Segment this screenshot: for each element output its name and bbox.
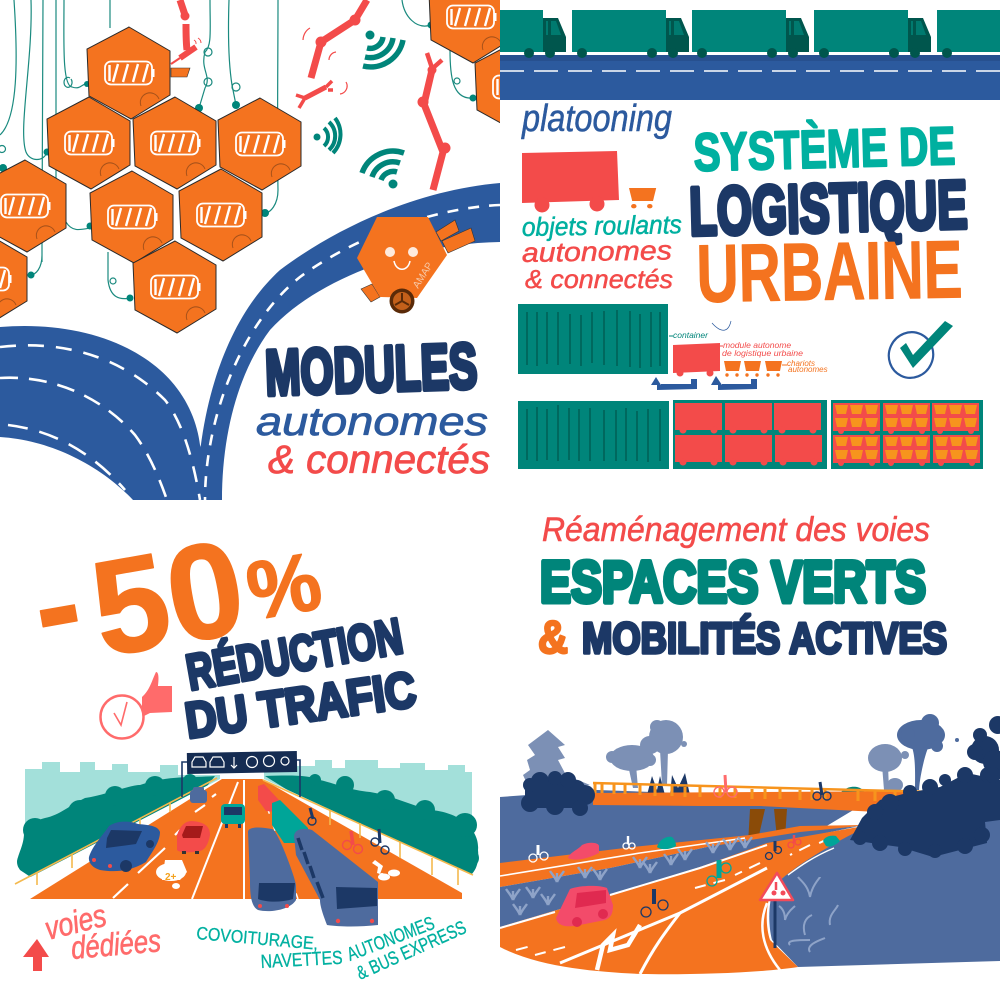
teal car xyxy=(657,837,676,849)
panel: système de logistique urbaine xyxy=(500,0,1000,469)
panel: modules autonomes et connectés xyxy=(0,0,558,500)
icon: red module xyxy=(522,151,619,212)
heading: du trafic: DU TRAFIC xyxy=(182,661,419,749)
legend: module xyxy=(720,340,803,358)
dark tree top right xyxy=(967,716,1000,783)
green dome xyxy=(836,787,868,800)
arrows xyxy=(651,376,757,390)
text: autonomes: autonomes xyxy=(522,235,672,268)
text: platooning: platooning xyxy=(521,98,672,140)
icon: wifi 1 xyxy=(363,30,403,67)
cyclists on road xyxy=(529,835,801,917)
icon: wifi 3 xyxy=(362,151,404,188)
panel: espaces verts et mobilités actives xyxy=(500,511,1000,974)
legend: chariots: autonomes xyxy=(788,365,828,374)
bridge xyxy=(593,783,940,812)
legend: module: de logistique urbaine xyxy=(722,348,803,358)
hillside plants xyxy=(779,877,838,952)
text: objets roulants: objets roulants xyxy=(522,209,682,242)
text: et connectés: & connectés xyxy=(525,264,673,294)
heading: -50%: % xyxy=(240,536,328,638)
bus one xyxy=(248,827,296,911)
text: bus express: & BUS EXPRESS xyxy=(353,917,470,985)
platoon road xyxy=(500,55,1000,100)
overhead sign gantry xyxy=(182,751,300,797)
icon: wifi 2 xyxy=(314,118,340,153)
heading: -50%: - xyxy=(22,526,92,683)
road surface xyxy=(15,779,474,899)
icon: ampersand: & xyxy=(538,611,568,663)
carpool road marking: 2+ xyxy=(165,872,177,883)
panel: réduction du trafic xyxy=(15,484,479,985)
guardrails xyxy=(15,778,473,885)
heading: réduction: RÉDUCTION xyxy=(182,608,407,701)
red car xyxy=(177,821,210,854)
teal bus xyxy=(272,800,308,843)
bike lane marking xyxy=(372,860,400,880)
dark bush right xyxy=(850,767,1000,858)
text: et connectés: & connectés xyxy=(268,438,490,482)
cyclists xyxy=(308,808,389,854)
heading: modules: MODULES xyxy=(264,330,478,409)
legend: chariots: chariots xyxy=(787,359,815,368)
legend: chariots xyxy=(782,359,828,374)
legend: module: module autonome xyxy=(723,340,791,350)
bridge pillars xyxy=(748,809,787,844)
text: voies: voies xyxy=(41,897,110,947)
module xyxy=(673,343,720,376)
text: dédiées: dédiées xyxy=(69,922,162,966)
text: autonomes: autonomes xyxy=(256,400,488,444)
decorative tick xyxy=(712,321,731,330)
wire connector dots xyxy=(0,22,476,302)
module tab xyxy=(171,68,190,77)
bus two xyxy=(294,829,378,926)
icon: check mark xyxy=(881,321,953,385)
smiling autonomous module: AMAP xyxy=(411,260,436,291)
lane markings xyxy=(113,780,298,899)
bushes behind bridge xyxy=(647,773,690,795)
icon: clock and thumb xyxy=(100,672,172,738)
lower road xyxy=(500,826,864,974)
heading: -50%: 50 xyxy=(81,511,255,685)
trees background xyxy=(523,720,909,792)
upper road xyxy=(500,825,864,887)
forest xyxy=(17,774,479,890)
road markings xyxy=(0,205,500,500)
text: autonomes: AUTONOMES xyxy=(344,913,438,966)
blue ground upper xyxy=(500,790,870,870)
battery hexagon modules xyxy=(0,0,558,333)
container of modules xyxy=(673,400,827,469)
robot arm with pincers xyxy=(418,53,450,190)
cyclists on bridge xyxy=(714,775,831,800)
platoon trucks xyxy=(449,10,1000,58)
red car large xyxy=(556,886,613,927)
carpool road marking xyxy=(156,860,187,889)
road left xyxy=(0,326,218,500)
robot arm with screwdriver xyxy=(171,0,201,64)
smiling autonomous module xyxy=(357,217,475,314)
small distant car xyxy=(190,787,207,803)
blue car xyxy=(89,822,160,872)
legend: container: container xyxy=(673,330,709,340)
text: navettes: NAVETTES xyxy=(260,948,343,973)
icon: orange cart xyxy=(629,188,656,208)
connecting wires xyxy=(0,0,473,299)
icon: red up arrow xyxy=(23,939,49,971)
warning road sign xyxy=(760,873,793,948)
container xyxy=(518,304,668,374)
median plants xyxy=(506,837,752,915)
robot arm with wrench xyxy=(296,0,367,108)
distant red bus xyxy=(258,784,279,812)
median xyxy=(500,826,860,927)
container of carts xyxy=(831,400,983,469)
red car small xyxy=(568,843,599,860)
teal shuttle xyxy=(221,804,245,828)
text: covoiturage: COVOITURAGE, xyxy=(196,923,319,954)
road right xyxy=(197,183,500,500)
teal car far xyxy=(823,836,840,847)
skyline xyxy=(25,757,472,830)
lower road markings xyxy=(500,838,830,974)
carts xyxy=(724,361,782,377)
blue hillside xyxy=(769,815,1000,967)
dark bush left xyxy=(521,771,595,816)
container bottom xyxy=(518,401,669,469)
tall tree xyxy=(897,714,959,790)
text: réaménagement des voies: Réaménagement des voies xyxy=(542,511,930,549)
